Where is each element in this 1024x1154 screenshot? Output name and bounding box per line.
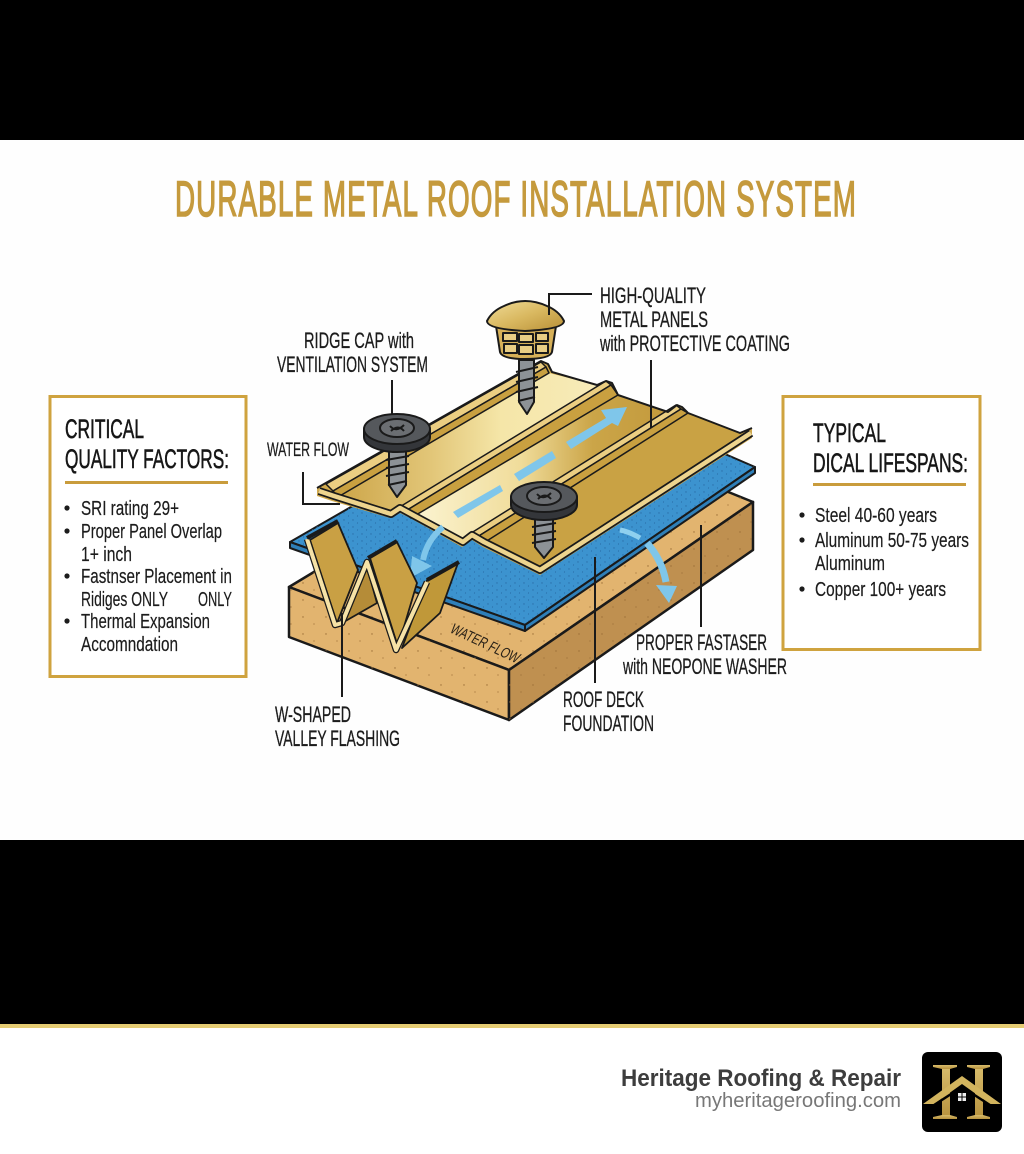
arrow: off the edge	[620, 530, 677, 603]
footer background	[0, 1028, 1024, 1154]
panel base	[317, 361, 752, 575]
list: quality factors: Fastnser Placement in	[81, 565, 232, 588]
panel: critical quality factors	[50, 396, 246, 676]
deck label: water flow: WATER FLOW	[447, 621, 524, 667]
ridge cap vent	[487, 301, 564, 414]
label: ridge cap	[277, 328, 428, 377]
list: lifespans: Aluminum 50-75 years	[815, 529, 969, 552]
label: w-shaped valley flashing	[275, 702, 400, 751]
list: quality factors: 1+ inch	[81, 543, 132, 566]
list: quality factors: Ridiges ONLY	[81, 588, 168, 611]
label: water flow: WATER FLOW	[267, 440, 349, 461]
logo H	[933, 1065, 990, 1119]
footer brand text: myheritageroofing.com	[695, 1090, 901, 1112]
roof assembly diagram	[289, 301, 755, 720]
panel front edge	[319, 433, 751, 570]
label: ridge cap: RIDGE CAP with	[304, 328, 414, 353]
list: lifespans: Copper 100+ years	[815, 578, 946, 601]
list: quality factors: Proper Panel Overlap	[81, 520, 222, 543]
panel flat sections	[338, 373, 606, 514]
label: roof deck foundation: ROOF DECK	[563, 687, 644, 712]
black band top	[0, 0, 1024, 140]
panel: typical lifespans	[783, 396, 980, 650]
label: w-shaped valley flashing: VALLEY FLASHING	[275, 726, 400, 751]
label: metal panels: with PROTECTIVE COATING	[599, 331, 790, 356]
heading: typical lifespans: TYPICAL	[813, 418, 886, 448]
w-shaped valley flashing	[307, 521, 459, 650]
fastener with washer 1	[364, 414, 430, 497]
label: metal panels	[599, 283, 790, 356]
logo	[922, 1052, 1002, 1132]
blue underlayment layer	[290, 400, 755, 631]
label: metal panels: HIGH-QUALITY	[600, 283, 706, 308]
label: metal panels: METAL PANELS	[600, 307, 708, 332]
list: lifespans: Aluminum	[815, 552, 885, 575]
footer brand text	[621, 1065, 901, 1112]
heading: typical lifespans	[813, 418, 968, 478]
list: lifespans: Steel 40-60 years	[815, 504, 937, 527]
water flow arrows	[410, 407, 677, 603]
white content panel	[0, 140, 1024, 840]
roof deck foundation	[289, 440, 753, 720]
arrow: to flashing	[410, 527, 443, 578]
label: ridge cap: VENTILATION SYSTEM	[277, 352, 428, 377]
label: roof deck foundation: FOUNDATION	[563, 711, 654, 736]
panel outline	[317, 361, 752, 488]
footer brand text: Heritage Roofing & Repair	[621, 1065, 901, 1092]
label: proper fastener: with NEOPONE WASHER	[622, 654, 787, 679]
fastener with washer 2	[511, 482, 577, 558]
list: quality factors	[64, 497, 232, 656]
heading: critical quality factors: QUALITY FACTORS:	[65, 444, 229, 474]
label: proper fastener: PROPER FASTASER	[636, 630, 767, 655]
label: roof deck foundation	[563, 687, 654, 736]
list: quality factors: ONLY	[198, 588, 232, 611]
heading: critical quality factors: CRITICAL	[65, 414, 144, 444]
leader lines	[303, 294, 701, 697]
gold footer line	[0, 1024, 1024, 1028]
list: lifespans	[799, 504, 969, 601]
list: quality factors: Accomndation	[81, 633, 178, 656]
list: quality factors: SRI rating 29+	[81, 497, 179, 520]
panel ribs	[326, 362, 688, 544]
list: quality factors: Thermal Expansion	[81, 610, 210, 633]
label: w-shaped valley flashing: W-SHAPED	[275, 702, 351, 727]
label: proper fastener	[622, 630, 787, 679]
arrow: along panel	[453, 407, 627, 518]
screw	[516, 360, 538, 414]
heading: critical quality factors	[65, 414, 229, 474]
logo window	[958, 1093, 966, 1101]
black band bottom	[0, 840, 1024, 1024]
metal panels	[317, 361, 752, 575]
logo roof	[923, 1076, 1001, 1104]
